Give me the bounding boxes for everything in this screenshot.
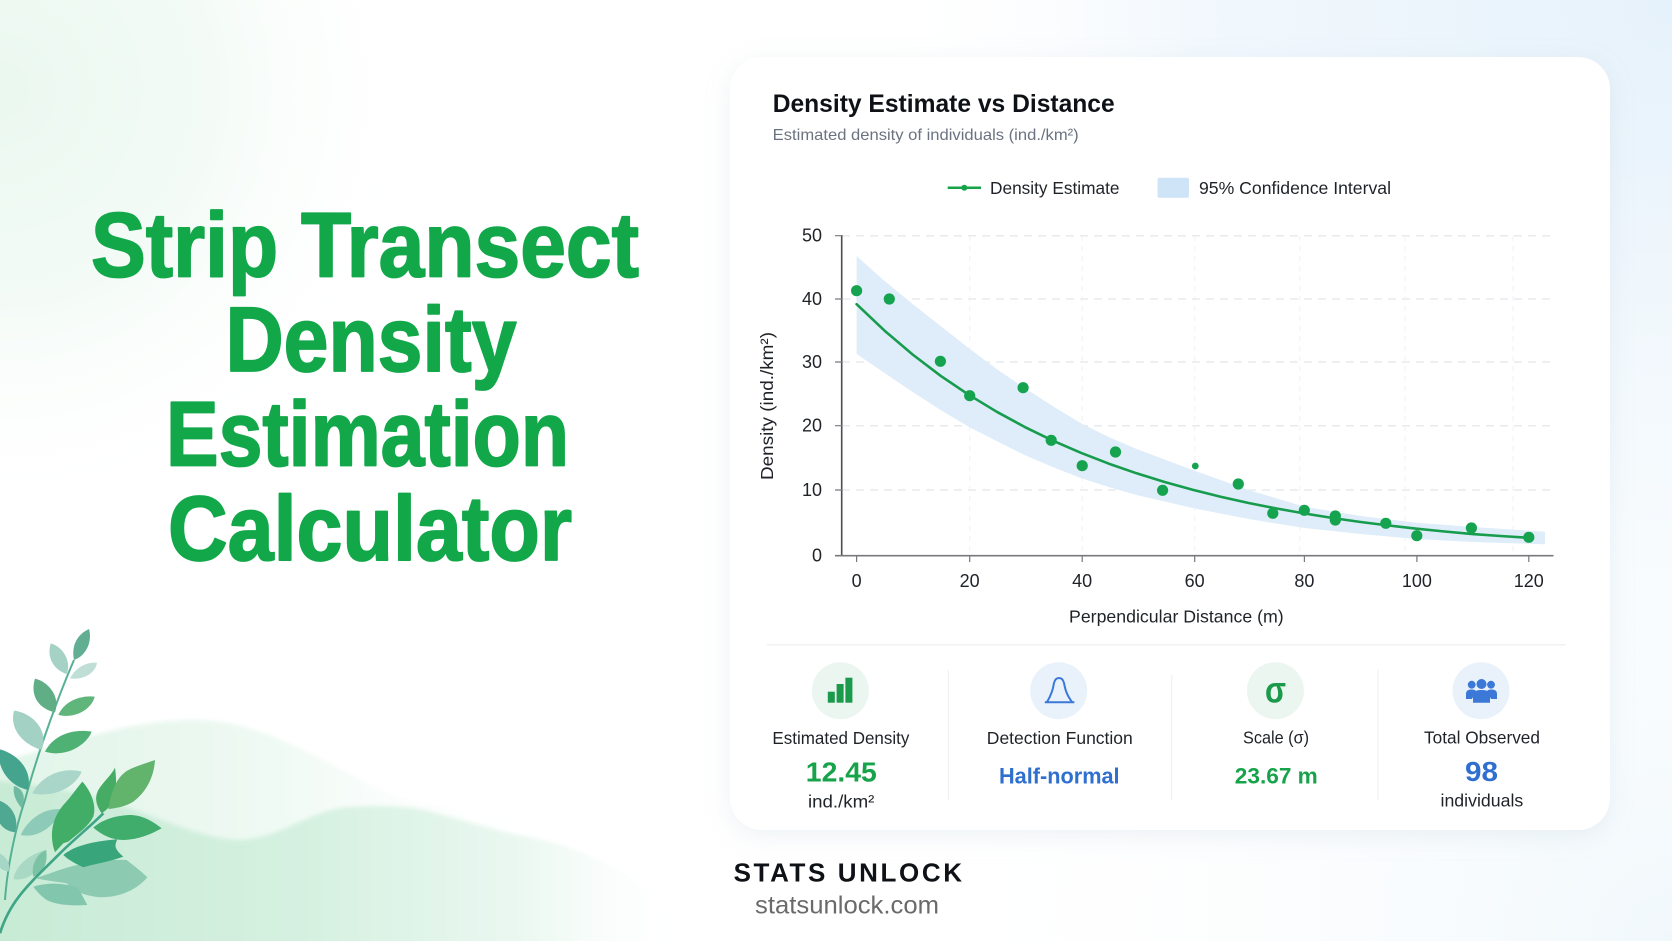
title: Estimation [166,384,569,486]
x axis tick labels [852,571,1544,591]
confidence band [857,256,1545,544]
stat: detection function [987,662,1133,788]
chart title: Density Estimate vs Distance [773,90,1115,118]
axes [835,235,1554,562]
x axis tick labels: 20 [960,571,980,591]
x axis tick labels: 0 [852,571,862,591]
density curve [857,304,1529,538]
x axis tick labels: 40 [1072,571,1092,591]
y axis tick labels: 0 [812,546,822,566]
x axis label: Perpendicular Distance (m) [1069,607,1284,627]
observed data points [851,285,1534,543]
title [91,194,639,580]
y axis label: Density (ind./km²) [757,332,777,480]
stat: total observed: individuals [1440,791,1524,811]
stat: estimated density [772,662,910,812]
y axis tick labels: 40 [802,289,822,309]
x axis tick labels: 120 [1514,571,1544,591]
stat: total observed: Total Observed [1424,728,1540,748]
stat: estimated density: ind./km² [808,792,875,812]
icon: bell curve [1030,662,1087,719]
stat: total observed: 98 [1465,756,1498,787]
brand url: statsunlock.com [755,892,939,920]
stat: total observed [1424,662,1540,811]
icon: bar chart [812,662,869,719]
stat: estimated density: 12.45 [806,757,877,788]
panel: chart card [730,57,1610,830]
y axis tick labels: 50 [802,226,822,246]
legend: Density Estimate [990,178,1120,198]
title: Calculator [168,478,572,580]
y axis tick labels: 20 [802,416,822,436]
brand name: STATS UNLOCK [734,858,962,888]
title: Density [226,289,516,391]
icon: leafy plant decoration [0,629,162,933]
stat: estimated density: Estimated Density [772,728,910,748]
icon: people group [1452,662,1510,719]
stat: detection function: Half-normal [999,763,1120,788]
y axis tick labels: 10 [802,480,822,500]
x axis tick labels: 80 [1294,571,1314,591]
stat: scale sigma: Scale (σ) [1243,728,1309,748]
stat: scale sigma [1235,662,1318,788]
title: Strip Transect [91,194,639,296]
y axis tick labels [802,226,822,566]
chart subtitle: Estimated density of individuals (ind./km²) [773,127,1079,144]
x axis tick labels: 60 [1185,571,1205,591]
stat: detection function: Detection Function [987,728,1133,748]
legend [948,178,1391,198]
legend: 95% Confidence Interval [1199,178,1391,198]
stat: scale sigma: 23.67 m [1235,763,1318,788]
line chart: density vs distance [757,226,1554,627]
icon: sigma: σ [1265,670,1286,710]
y axis tick labels: 30 [802,352,822,372]
x axis tick labels: 100 [1402,571,1432,591]
